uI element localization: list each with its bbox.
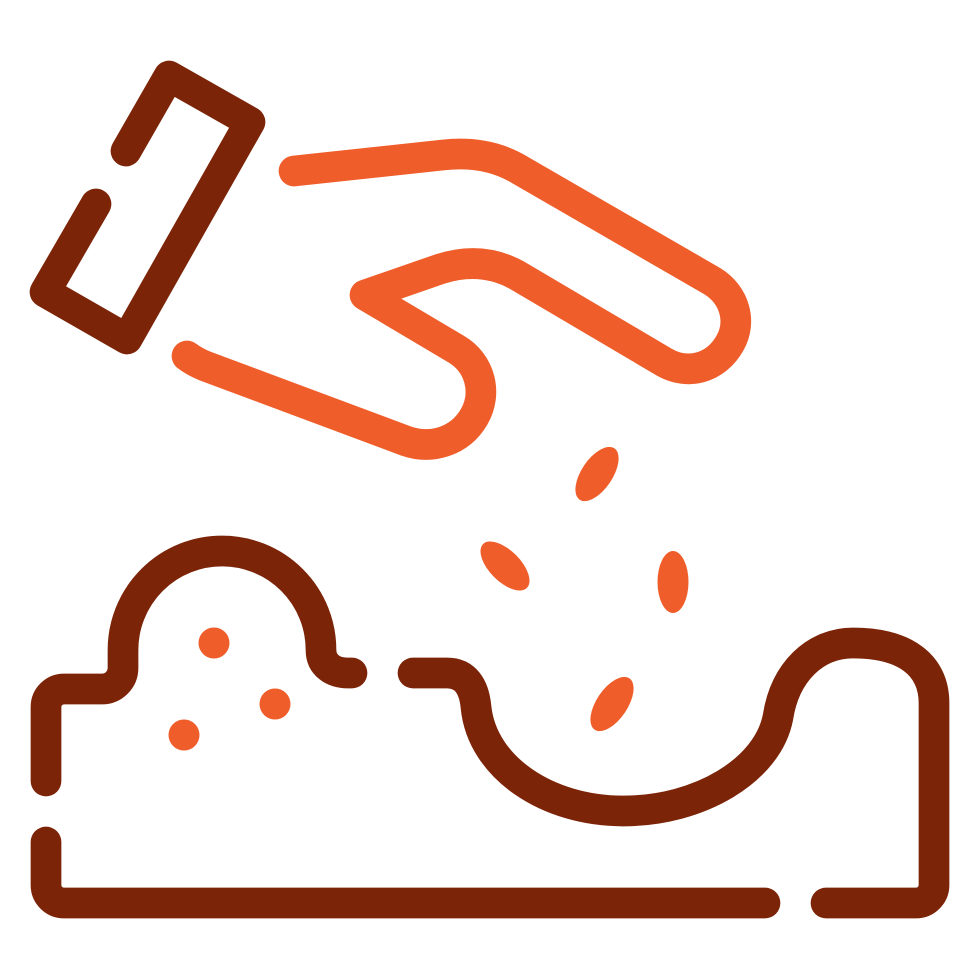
icon: falling seeds bbox=[472, 440, 688, 738]
icon: hand outline bbox=[187, 154, 736, 444]
icon: seeds in soil bbox=[168, 628, 290, 750]
icon: sleeve cuff bbox=[45, 76, 250, 339]
icon: soil mound and furrow bbox=[46, 551, 934, 903]
